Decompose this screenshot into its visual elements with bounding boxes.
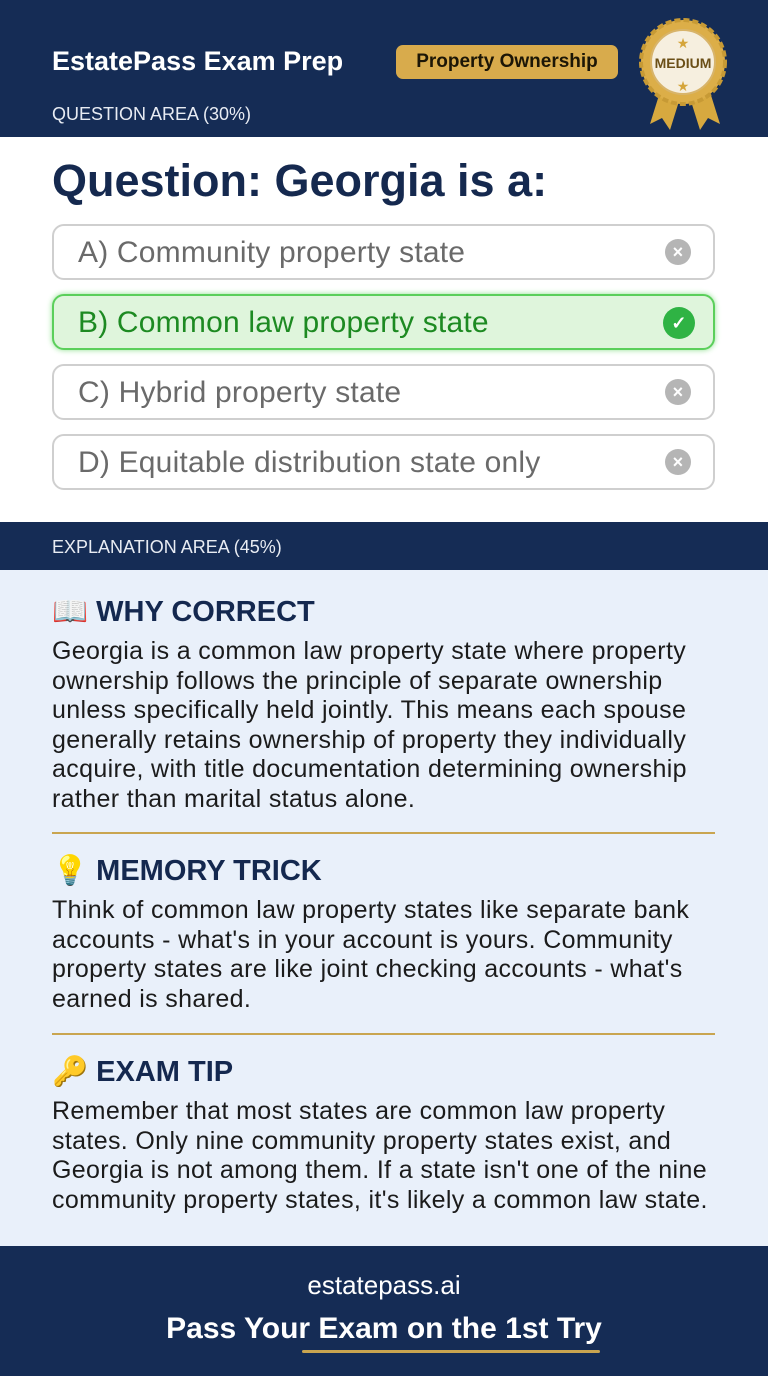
option B correct: B) Common law property state: [78, 306, 489, 339]
icon: medium difficulty medal: [639, 18, 727, 130]
text: memory trick: [52, 896, 689, 1013]
text: memory trick: accounts - what's in your account is yours. Community: [52, 926, 673, 954]
option A: A) Community property state: [78, 236, 465, 269]
option D: D) Equitable distribution state only: [78, 446, 540, 479]
option B correct: [52, 294, 715, 350]
question title: Question: Georgia is a:: [52, 155, 547, 206]
text: exam tip: community property states, it's likely a common law state.: [52, 1186, 708, 1214]
option A: [52, 224, 715, 280]
option D: [52, 434, 715, 490]
footer tagline: Pass Your Exam on the 1st Try: [166, 1312, 602, 1345]
text: memory trick: earned is shared.: [52, 985, 251, 1013]
text: exam tip: Georgia is not among them. If a state isn't one of the nine: [52, 1156, 707, 1184]
heading: exam tip: 🔑 EXAM TIP: [52, 1056, 233, 1088]
question area background: [0, 137, 768, 522]
text: why correct: rather than marital status alone.: [52, 785, 415, 813]
topic badge: Property Ownership: [416, 51, 598, 72]
text: exam tip: [52, 1097, 708, 1214]
text: why correct: ownership follows the principle of separate ownership: [52, 667, 663, 695]
explanation band: EXPLANATION AREA (45%): [52, 537, 282, 557]
tagline underline: [302, 1350, 600, 1353]
topic badge: [396, 45, 618, 79]
text: memory trick: Think of common law property states like separate bank: [52, 896, 689, 924]
text: exam tip: Remember that most states are common law property: [52, 1097, 665, 1125]
icon: medium difficulty medal: MEDIUM: [655, 55, 711, 71]
text: why correct: acquire, with title documentation determining ownership: [52, 755, 687, 783]
heading: why correct: 📖 WHY CORRECT: [52, 596, 315, 628]
text: why correct: Georgia is a common law property state where property: [52, 637, 686, 665]
icon: medium difficulty medal: ★: [677, 35, 689, 51]
text: memory trick: property states are like joint checking accounts - what's: [52, 955, 683, 983]
text: exam tip: states. Only nine community property states exist, and: [52, 1127, 671, 1155]
footer: [0, 1246, 768, 1376]
header: [0, 0, 768, 137]
option A: ×: [673, 242, 683, 262]
option C: [52, 364, 715, 420]
option D: ×: [673, 452, 683, 472]
text: why correct: [52, 637, 687, 813]
text: why correct: generally retains ownership of property they individually: [52, 726, 686, 754]
option B correct: ✓: [671, 313, 687, 333]
option C: C) Hybrid property state: [78, 376, 401, 409]
footer url: estatepass.ai: [307, 1270, 461, 1300]
icon: medium difficulty medal: ★: [677, 78, 689, 94]
option C: ×: [673, 382, 683, 402]
explanation band: [0, 522, 768, 570]
text: why correct: unless specifically held jointly. This means each spouse: [52, 696, 686, 724]
header title: EstatePass Exam Prep: [52, 46, 343, 76]
section label: question area: QUESTION AREA (30%): [52, 104, 251, 124]
heading: memory trick: 💡 MEMORY TRICK: [52, 855, 322, 887]
